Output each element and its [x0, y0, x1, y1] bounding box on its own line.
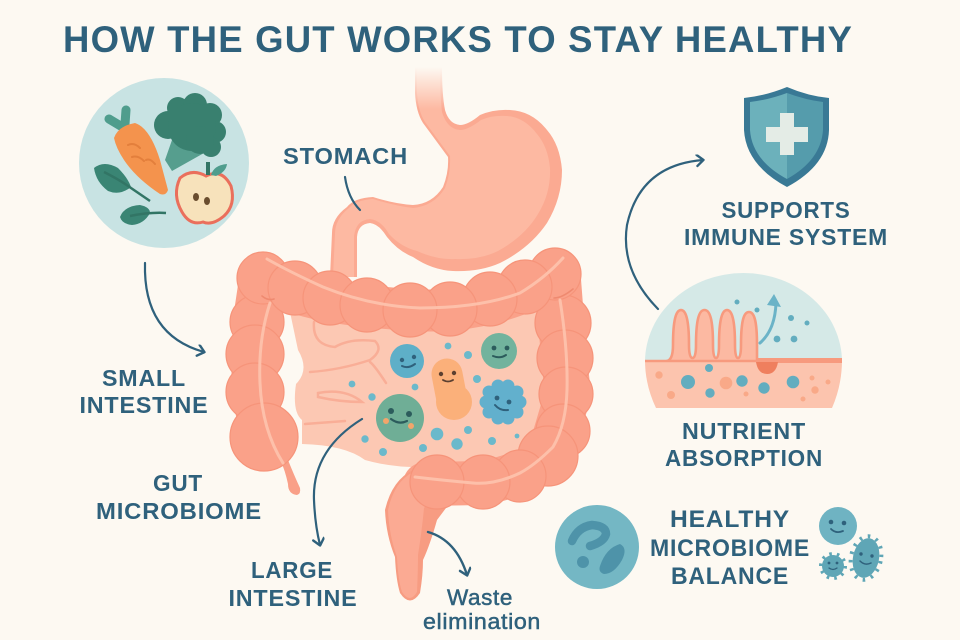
label: supports immune system: SUPPORTS — [722, 197, 850, 223]
microbe: blue flower — [480, 380, 526, 424]
label: waste elimination — [423, 585, 541, 634]
label: nutrient absorption: NUTRIENT — [682, 418, 806, 444]
label: healthy microbiome balance: BALANCE — [671, 563, 789, 590]
panel: nutrient absorption — [645, 273, 842, 408]
icon: friendly bacteria — [819, 507, 885, 583]
label: small intestine: SMALL — [102, 365, 186, 391]
arrow: to waste — [428, 532, 467, 575]
label: supports immune system — [684, 197, 888, 250]
label: gut microbiome: MICROBIOME — [96, 498, 262, 524]
label: large intestine — [228, 557, 358, 611]
label: stomach: STOMACH — [283, 143, 408, 169]
label: healthy microbiome balance: MICROBIOME — [650, 535, 810, 562]
label: gut microbiome — [96, 470, 262, 524]
icon: shield — [744, 87, 829, 187]
label: waste elimination: Waste — [447, 585, 513, 610]
microbe: blue round — [390, 344, 424, 378]
organ: small intestine — [290, 312, 549, 467]
icon: food plate — [79, 78, 249, 248]
label: large intestine: INTESTINE — [228, 585, 358, 611]
organ: large intestine — [226, 248, 593, 600]
label: waste elimination: elimination — [423, 609, 541, 634]
label: gut microbiome: GUT — [153, 470, 203, 496]
label: healthy microbiome balance: HEALTHY — [670, 506, 790, 533]
arrow: absorption to immune system — [626, 160, 703, 309]
icon: microbiome circle — [555, 505, 639, 589]
label: large intestine: LARGE — [251, 557, 333, 583]
label: small intestine: INTESTINE — [80, 392, 208, 418]
pointer: stomach — [345, 177, 360, 210]
gut microbes — [349, 333, 526, 456]
label: supports immune system: IMMUNE SYSTEM — [684, 224, 888, 250]
label: small intestine — [80, 365, 208, 418]
title: HOW THE GUT WORKS TO STAY HEALTHY — [63, 19, 853, 60]
label: healthy microbiome balance — [650, 506, 810, 590]
organ: stomach — [330, 67, 562, 277]
arrow: food to small intestine — [145, 263, 204, 352]
label: nutrient absorption: ABSORPTION — [665, 445, 823, 471]
arrow: microbiome to large intestine — [314, 419, 362, 545]
microbe: big green — [376, 394, 424, 442]
microbe: orange bean — [436, 371, 472, 420]
label: nutrient absorption — [665, 418, 823, 471]
microbe: green round — [481, 333, 517, 369]
